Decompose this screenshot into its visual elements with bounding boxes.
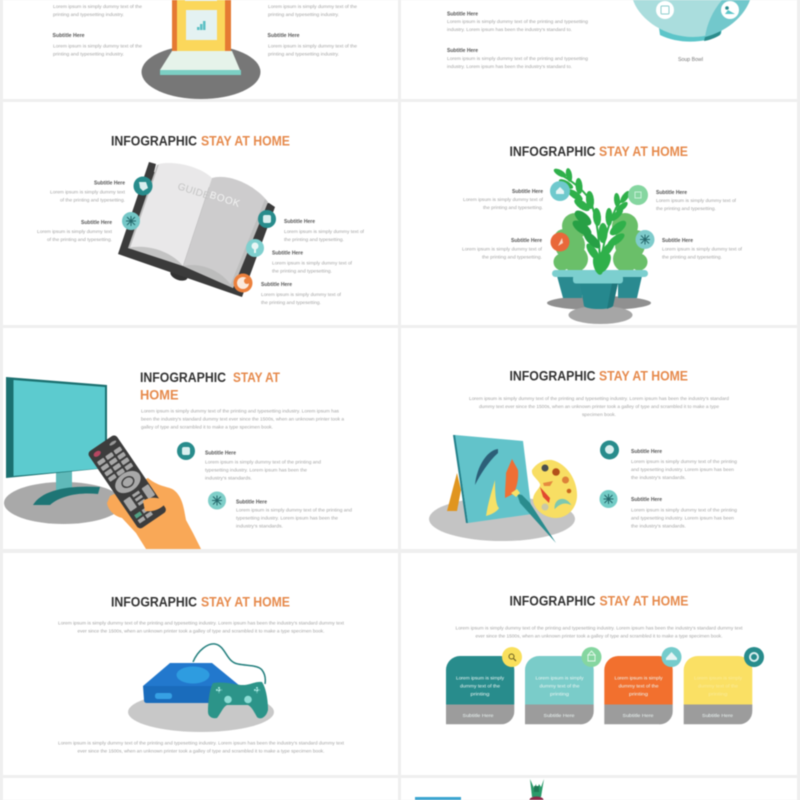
- text block: plant left one: Lorem ipsum is simply dummy text of: [463, 197, 544, 202]
- text block: intro: [141, 408, 344, 430]
- text block: tv item one: typesetting industry. Lorem ipsum has been the: [205, 468, 307, 472]
- text block: tv item one: Subtitle Here: [205, 450, 236, 456]
- text block: first item: [447, 12, 588, 32]
- text block: right column: printing and typesetting industry.: [268, 12, 339, 17]
- panel: soup bowl slide: [401, 0, 797, 99]
- text block: tv item two: industry's standards.: [236, 524, 283, 528]
- icon: tv badge one: [177, 442, 195, 460]
- card: light teal: printing: [550, 692, 569, 698]
- text block: first item: industry. Lorem ipsum has been the industry's standard to.: [447, 27, 572, 32]
- text block: book right two: the printing and typesetting.: [272, 268, 332, 274]
- illustration: open guide book: GUIDE: [176, 181, 211, 202]
- text block: right column: Subtitle Here: [268, 33, 300, 39]
- text block: plant right one: [656, 190, 737, 211]
- text block: painting item two: Subtitle Here: [631, 497, 662, 503]
- text block: first item: Subtitle Here: [447, 12, 478, 18]
- text block: book right two: [272, 250, 353, 274]
- title: STAY AT HOME: [201, 134, 290, 150]
- text block: left column: printing and typesetting industry.: [53, 12, 124, 17]
- icon: plant badge two: [628, 185, 648, 205]
- text block: left column: printing and typesetting industry.: [53, 52, 124, 56]
- text block: painting item two: Lorem ipsum is simply dummy text of the printing: [631, 508, 737, 512]
- card: light teal: dummy text of the: [540, 684, 580, 690]
- text block: tv item one: industry's standards.: [205, 476, 252, 480]
- text block: book right two: Lorem ipsum is simply dummy text of: [272, 260, 353, 266]
- label: soup bowl: Soup Bowl: [678, 57, 703, 63]
- title: INFOGRAPHIC: [111, 134, 197, 150]
- text block: book left two: [37, 220, 113, 242]
- card: light teal: Subtitle Here: [544, 713, 575, 719]
- text block: tv item two: typesetting industry. Lorem ipsum has been the: [236, 516, 338, 520]
- text block: tv item one: Lorem ipsum is simply dummy text of the printing and: [205, 460, 321, 464]
- panel: television slide: [3, 328, 398, 549]
- card: orange: dummy text of the: [618, 684, 659, 690]
- text block: right column: Lorem ipsum is simply dummy text of the: [268, 4, 357, 9]
- card: light teal: [525, 647, 602, 724]
- text block: intro: [469, 396, 729, 417]
- text block: second item: Lorem ipsum is simply dummy text of the printing and typesetting: [447, 56, 588, 61]
- text block: bottom description: Lorem ipsum is simply dummy text of the printing and typesetting industry. Lorem ipsum has been the industry's standard dummy text: [58, 740, 345, 746]
- text block: book right one: [284, 219, 365, 242]
- text block: book left one: Subtitle Here: [94, 180, 125, 186]
- title: [510, 594, 688, 610]
- text block: plant right one: Subtitle Here: [656, 190, 687, 196]
- text block: painting item one: and typesetting industry. Lorem ipsum has been: [631, 467, 734, 472]
- text block: tv item one: [205, 450, 321, 480]
- text block: first item: Lorem ipsum is simply dummy text of the printing and typesetting: [447, 19, 588, 24]
- title: INFOGRAPHIC: [510, 594, 596, 610]
- title: INFOGRAPHIC: [111, 594, 197, 610]
- text block: plant right one: Lorem ipsum is simply dummy text of: [656, 198, 737, 203]
- illustration: television and remote: [4, 377, 201, 549]
- card: yellow: [684, 647, 764, 724]
- icon: plant badge one: [550, 181, 570, 201]
- illustration: potted plants: [547, 167, 651, 324]
- title: STAY AT HOME: [600, 594, 688, 610]
- card: teal: [446, 647, 522, 724]
- icon: painting badge one: [600, 440, 619, 460]
- text block: book right one: Lorem ipsum is simply dummy text of: [284, 229, 365, 234]
- title: [140, 370, 280, 404]
- card: teal: dummy text of the: [460, 684, 500, 690]
- title: [510, 368, 688, 384]
- text block: left column: [52, 4, 142, 56]
- icon: teal badge two: [122, 212, 140, 230]
- text block: tv item two: Lorem ipsum is simply dummy text of the printing and: [236, 508, 352, 512]
- text block: right column: Lorem ipsum is simply dummy text of the: [268, 44, 357, 48]
- card: light teal: Lorem ipsum is simply: [536, 676, 584, 682]
- text block: painting item one: Subtitle Here: [631, 449, 662, 455]
- text block: book right two: Subtitle Here: [272, 250, 303, 256]
- text block: painting item two: the industry's standards.: [631, 524, 686, 528]
- title: INFOGRAPHIC: [510, 144, 596, 160]
- card: yellow: Subtitle Here: [702, 713, 733, 719]
- text block: intro: galley of type and scrambled it to make a type specimen book.: [141, 424, 273, 430]
- text block: right column: printing and typesetting industry.: [268, 52, 339, 56]
- illustration: game console and controller: [128, 644, 274, 732]
- text block: left column: Subtitle Here: [52, 33, 85, 39]
- title: INFOGRAPHIC: [140, 370, 226, 386]
- text block: book right three: Lorem ipsum is simply dummy text of: [261, 292, 342, 297]
- icon: plant badge three: [550, 232, 570, 252]
- text block: intro: Lorem ipsum is simply dummy text of the printing and typesetting industry. Lorem ipsum has been the industry's standard dummy text: [456, 626, 743, 630]
- card: orange: [604, 647, 682, 724]
- card: yellow: dummy text of the: [698, 684, 738, 690]
- cropped blue heading bar: [415, 797, 461, 800]
- text block: plant right two: Lorem ipsum is simply dummy text of: [662, 246, 743, 252]
- text block: plant right two: Subtitle Here: [662, 238, 693, 244]
- card: orange: Subtitle Here: [622, 713, 654, 719]
- text block: plant left one: the printing and typesetting.: [483, 205, 543, 210]
- text block: second item: [447, 48, 588, 69]
- card: orange: Lorem ipsum is simply: [614, 676, 663, 682]
- text block: intro: been the industry's standard dummy text ever since the 1500s, when an unknown printer took a: [141, 416, 344, 422]
- text block: book right one: the printing and typesetting.: [284, 237, 344, 242]
- card: teal: Lorem ipsum is simply: [456, 676, 505, 682]
- icon: teal badge three: [258, 210, 276, 228]
- text block: plant left two: the printing and typesetting.: [482, 254, 542, 260]
- text block: second item: industry. Lorem ipsum has been the industry's standard to.: [447, 64, 572, 69]
- text block: book right three: Subtitle Here: [261, 282, 292, 288]
- text block: intro: specimen book.: [582, 412, 616, 417]
- title: [510, 144, 688, 160]
- text block: intro: dummy text ever since the 1500s, when an unknown printer took a galley of type and scrambled it to make a type: [479, 404, 719, 409]
- text block: bottom description: ever since the 1500s, when an unknown printer took a galley of type and scrambled it to make a type specimen book.: [78, 748, 324, 754]
- text block: plant left one: Subtitle Here: [512, 189, 543, 195]
- title: STAY AT: [233, 370, 280, 386]
- card: yellow: printing: [708, 692, 728, 698]
- icon: tv badge two: [208, 492, 226, 510]
- text block: book left two: Subtitle Here: [81, 220, 112, 226]
- illustration: easel and palette: [429, 435, 577, 543]
- text block: book right three: [261, 282, 342, 305]
- text block: right column: [268, 4, 357, 56]
- text block: intro: [456, 626, 743, 638]
- text block: top description: ever since the 1500s, when an unknown printer took a galley of type and scrambled it to make a type specimen book.: [78, 628, 324, 634]
- panel: game console slide: [3, 553, 398, 775]
- title: INFOGRAPHIC: [510, 368, 596, 384]
- text block: plant right one: the printing and typesetting.: [656, 206, 716, 211]
- title: STAY AT HOME: [599, 368, 688, 384]
- text block: left column: Lorem ipsum is simply dummy text of the: [53, 4, 142, 9]
- illustration: open guide book: [118, 162, 275, 297]
- icon: light badge four: [246, 239, 264, 257]
- card: yellow: Lorem ipsum is simply: [694, 676, 743, 682]
- panel: plant slide: [401, 102, 797, 325]
- illustration: soup bowl: [633, 0, 750, 42]
- text block: plant left two: Subtitle Here: [511, 238, 542, 244]
- text block: second item: Subtitle Here: [447, 48, 478, 54]
- text block: top description: [58, 620, 345, 634]
- illustration: cropped potted plant: [530, 779, 544, 800]
- icon: plant badge four: [636, 230, 654, 249]
- title: [111, 594, 290, 610]
- text block: intro: ever since the 1500s, when an unknown printer took a galley of type and scrambled it to make a type specimen book.: [476, 634, 722, 638]
- text block: painting item one: Lorem ipsum is simply dummy text of the printing: [631, 459, 737, 464]
- icon: teal badge one: [134, 176, 152, 196]
- panel: painting slide: [401, 328, 797, 549]
- title: [111, 134, 290, 150]
- text block: painting item two: [631, 497, 737, 528]
- text block: intro: Lorem ipsum is simply dummy text of the printing and typesetting industry. Lorem ipsum has been the industry's standard: [469, 396, 729, 401]
- text block: painting item two: and typesetting industry. Lorem ipsum has been: [631, 516, 734, 520]
- text block: book left one: of the printing and typesetting.: [60, 198, 125, 202]
- panel: guide book slide: [3, 102, 398, 325]
- panel: cropped bottom right slide: [401, 778, 797, 800]
- card: orange: printing: [629, 692, 648, 698]
- text block: bottom description: [58, 740, 345, 754]
- card: teal: Subtitle Here: [462, 713, 494, 719]
- text block: left column: Lorem ipsum is simply dummy text of the: [53, 44, 142, 48]
- title: STAY AT HOME: [599, 144, 688, 160]
- text block: book left two: Lorem ipsum is simply dummy text: [37, 229, 113, 234]
- panel: tower slide: [3, 0, 398, 99]
- text block: book right three: the printing and typesetting.: [261, 300, 321, 305]
- text block: tv item two: [236, 500, 352, 528]
- text block: tv item two: Subtitle Here: [236, 500, 267, 506]
- illustration: tower book: [142, 0, 260, 99]
- text block: plant left one: [463, 189, 544, 210]
- text block: book left two: of the printing and typesetting.: [47, 237, 112, 242]
- icon: painting badge two: [600, 490, 618, 508]
- text block: book right one: Subtitle Here: [284, 219, 315, 225]
- text block: book left one: [50, 180, 126, 202]
- card: teal: printing: [470, 692, 490, 698]
- title: HOME: [140, 388, 178, 404]
- text block: painting item one: the industry's standards.: [631, 475, 686, 480]
- text block: intro: Lorem ipsum is simply dummy text of the printing and typesetting industry. Lorem ipsum has: [141, 408, 340, 414]
- text block: top description: Lorem ipsum is simply dummy text of the printing and typesetting industry. Lorem ipsum has been the industry's standard dummy text: [58, 620, 345, 626]
- text block: painting item one: [631, 449, 737, 480]
- icon: orange badge five: [234, 274, 252, 292]
- text block: plant right two: [662, 238, 743, 260]
- panel: cropped bottom left slide: [3, 778, 398, 800]
- text block: plant right two: the printing and typesetting.: [662, 254, 722, 260]
- panel: four cards slide: [401, 553, 797, 775]
- illustration: open guide book: BOOK: [208, 190, 241, 210]
- title: STAY AT HOME: [201, 594, 290, 610]
- text block: plant left two: [462, 238, 543, 260]
- text block: book left one: Lorem ipsum is simply dummy text: [50, 190, 126, 194]
- text block: plant left two: Lorem ipsum is simply dummy text of: [462, 246, 543, 252]
